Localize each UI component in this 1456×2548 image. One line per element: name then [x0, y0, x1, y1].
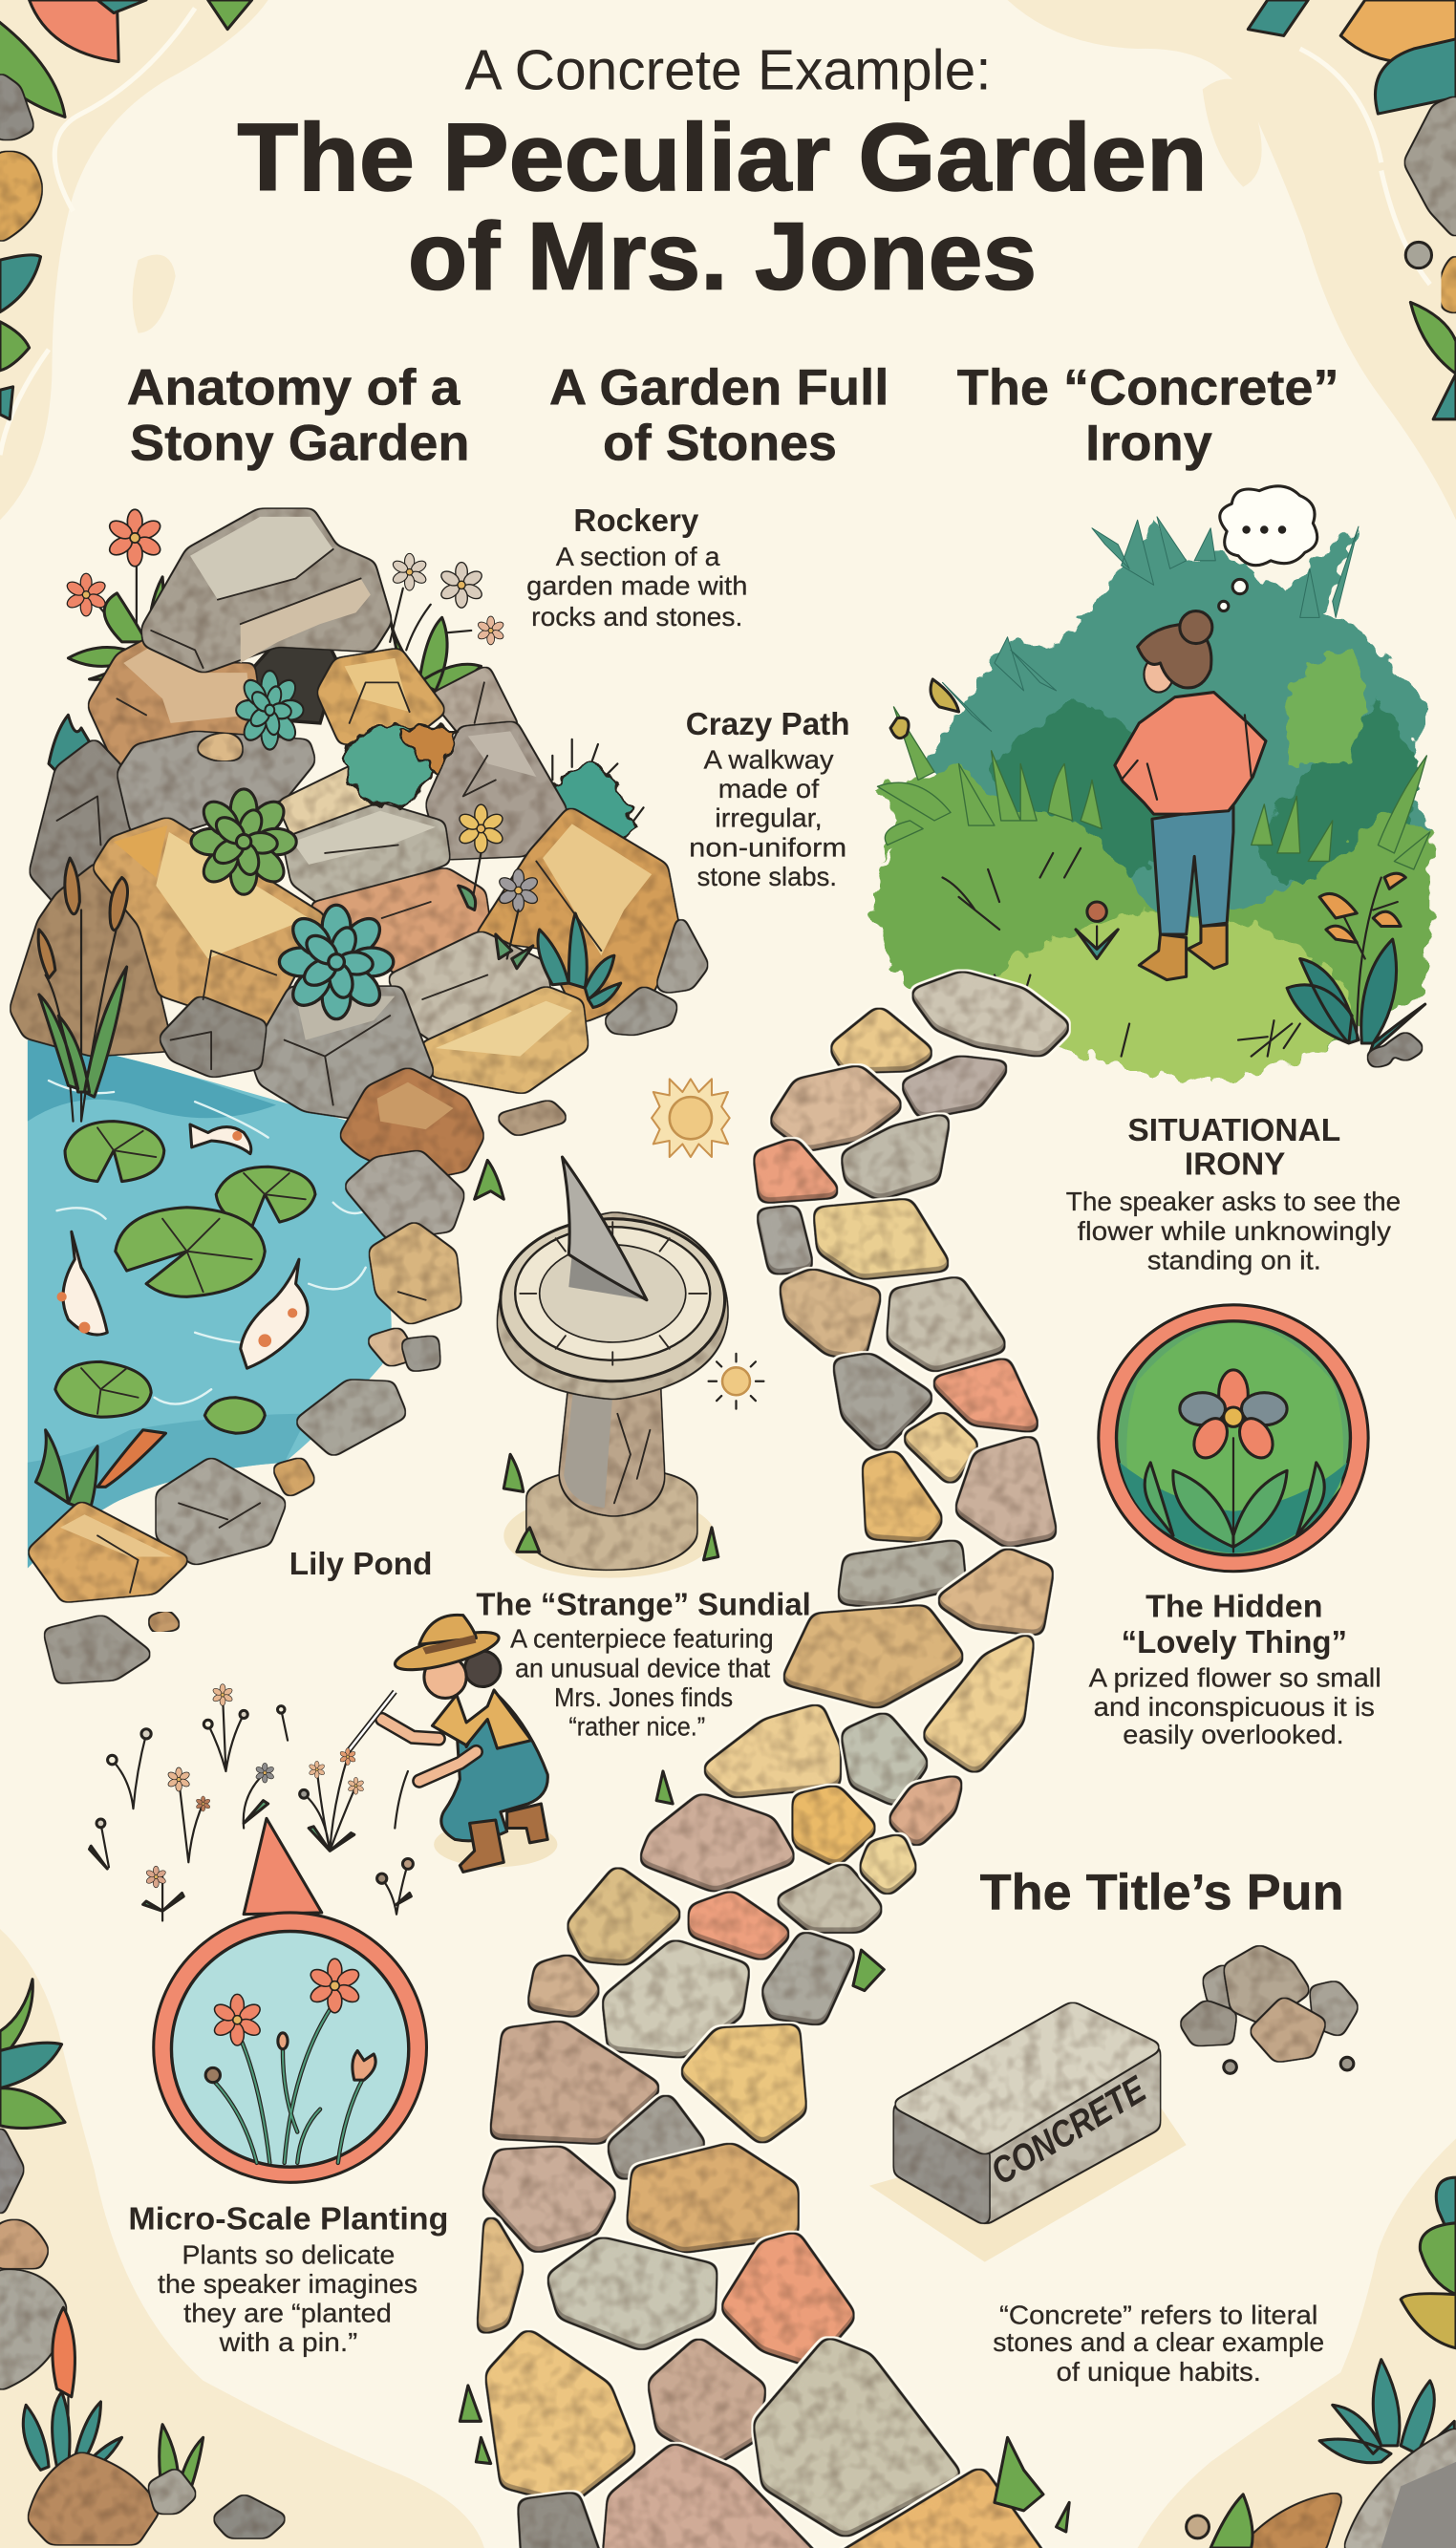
text: Situational Irony: The speaker asks to see the — [1066, 1187, 1401, 1216]
illustration: concrete block — [869, 2007, 1187, 2262]
illustration: lily pond — [28, 1040, 392, 1568]
woman figure — [1115, 611, 1266, 980]
text: Crazy Path: irregular, — [715, 803, 823, 833]
text: The Hidden Lovely Thing: easily overlooked. — [1123, 1720, 1344, 1749]
thought bubble — [1219, 486, 1317, 611]
heading: A Garden Full of Stones: of Stones — [603, 415, 837, 471]
text: The Strange Sundial — [476, 1588, 811, 1742]
illustration: concrete block: CONCRETE — [984, 2068, 1154, 2193]
text: Situational Irony — [1066, 1113, 1401, 1274]
text: Crazy Path: made of — [718, 774, 819, 803]
heading: A Garden Full of Stones — [549, 360, 889, 471]
text: Rockery: Rockery — [573, 503, 699, 539]
heading: The Concrete Irony — [957, 360, 1339, 471]
text: Concrete caption: “Concrete” refers to literal — [999, 2300, 1317, 2329]
corner foliage: bottom right — [1187, 2177, 1456, 2548]
text: Micro-Scale Planting — [128, 2202, 448, 2357]
lily pad — [55, 1122, 315, 1433]
text: Situational Irony: SITUATIONAL — [1127, 1113, 1340, 1148]
illustration: micro-scale plants — [90, 1684, 413, 1920]
subtitle: A Concrete Example: — [464, 38, 992, 102]
grass tufts — [460, 1771, 1069, 2532]
text: Situational Irony: IRONY — [1185, 1147, 1285, 1183]
plant with dark leaves — [1287, 873, 1425, 1053]
main title line 2: of Mrs. Jones — [408, 203, 1037, 310]
koi fish — [57, 1124, 308, 1487]
text: Crazy Path: non-uniform — [689, 832, 846, 862]
illustration: rockery — [14, 509, 703, 1511]
text: The Strange Sundial: an unusual device that — [515, 1653, 770, 1682]
heading: Anatomy of a Stony Garden: Anatomy of a — [127, 360, 460, 417]
leaves behind rockery — [49, 561, 644, 848]
corner foliage: bottom left — [0, 1980, 281, 2539]
reeds — [35, 858, 128, 1511]
icon: magnifier lens with tiny flowers — [154, 1818, 426, 2182]
illustration: sundial — [501, 1157, 725, 1578]
icon: large sun — [652, 1079, 730, 1157]
main title line 1: The Peculiar Garden — [237, 104, 1208, 211]
corner foliage: top right — [1248, 0, 1456, 419]
heading: Anatomy of a Stony Garden — [127, 360, 470, 471]
text: Rockery — [526, 503, 747, 632]
text: Situational Irony: flower while unknowingly — [1078, 1216, 1391, 1246]
text: The Strange Sundial: Mrs. Jones finds — [554, 1682, 733, 1712]
text: The Hidden Lovely Thing: “Lovely Thing” — [1122, 1625, 1347, 1660]
text: The Strange Sundial: “rather nice.” — [568, 1712, 705, 1742]
grass blades — [877, 707, 1430, 869]
icon: small sun — [709, 1354, 763, 1409]
illustration: crazy stone path — [460, 978, 1069, 2548]
text: Situational Irony: standing on it. — [1147, 1245, 1321, 1274]
text: Rockery: rocks and stones. — [531, 602, 742, 632]
text: Crazy Path: stone slabs. — [697, 862, 837, 891]
yellow seed heads — [890, 679, 959, 739]
text: Crazy Path: A walkway — [703, 745, 834, 775]
title — [237, 38, 1208, 310]
tiny hidden flower — [1076, 902, 1118, 959]
text: Micro-Scale Planting: with a pin.” — [219, 2327, 357, 2357]
illustration: rocks around pond — [32, 1073, 563, 1679]
illustration: pile of stones — [1185, 1950, 1354, 2073]
heading: Anatomy of a Stony Garden: Stony Garden — [130, 415, 470, 471]
top boulder — [146, 513, 387, 668]
hedge — [927, 520, 1430, 910]
heading: The Concrete Irony: The “Concrete” — [957, 360, 1339, 417]
text: Crazy Path: Crazy Path — [686, 707, 850, 742]
cracks on rocks — [57, 682, 601, 1105]
text: Lily Pond label: Lily Pond — [289, 1547, 432, 1582]
illustration: mrs jones in the overgrown garden — [872, 486, 1430, 1083]
illustration: gardener with tweezers — [348, 1615, 557, 1872]
text: Micro-Scale Planting: they are “planted — [183, 2299, 392, 2328]
text: Rockery: garden made with — [526, 571, 747, 601]
text: Micro-Scale Planting: Micro-Scale Planting — [128, 2202, 448, 2238]
text: The Hidden Lovely Thing — [1089, 1589, 1381, 1749]
text: The Hidden Lovely Thing: and inconspicuous it is — [1094, 1692, 1375, 1722]
text: The Strange Sundial: The “Strange” Sundial — [476, 1588, 811, 1623]
text: Concrete caption: of unique habits. — [1057, 2357, 1261, 2387]
text: The Strange Sundial: A centerpiece featuring — [510, 1624, 774, 1654]
heading: The Concrete Irony: Irony — [1085, 415, 1213, 471]
text: Concrete caption: stones and a clear example — [993, 2327, 1324, 2357]
corner foliage: top left — [0, 0, 252, 419]
text: The Hidden Lovely Thing: The Hidden — [1146, 1589, 1323, 1624]
text: Concrete caption — [993, 2300, 1324, 2387]
flowers on rockery — [65, 509, 621, 1008]
heading: The Title's Pun: The Title’s Pun — [980, 1865, 1344, 1921]
text: Crazy Path — [686, 707, 850, 891]
lawn and bushes — [872, 763, 1430, 1083]
text: Micro-Scale Planting: Plants so delicate — [182, 2239, 395, 2269]
text: Rockery: A section of a — [556, 542, 720, 571]
icon: hidden flower lens — [1097, 1301, 1370, 1574]
pebbles — [1372, 1037, 1419, 1062]
text: The Hidden Lovely Thing: A prized flower so small — [1089, 1663, 1381, 1693]
heading: A Garden Full of Stones: A Garden Full — [549, 360, 889, 417]
succulents — [191, 671, 459, 1019]
text: Micro-Scale Planting: the speaker imagines — [158, 2269, 418, 2299]
